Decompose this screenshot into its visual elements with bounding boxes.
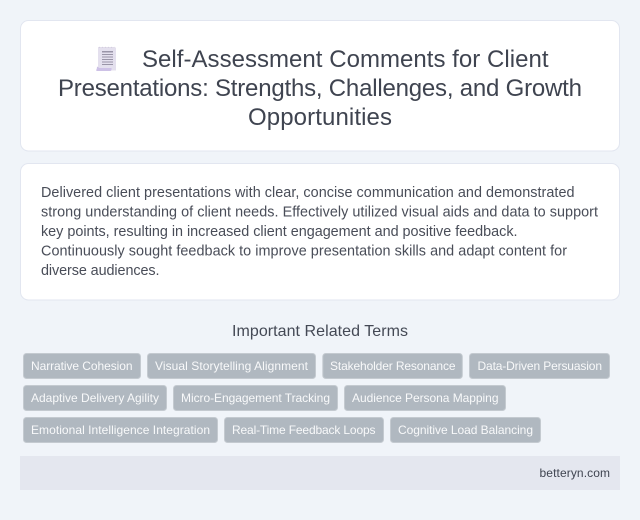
title: Self-Assessment Comments for Client xyxy=(142,46,549,73)
panel: related term tags: Real-Time Feedback Loops xyxy=(232,423,376,437)
text block: summary: Continuously sought feedback to improve presentation skills and adapt content for xyxy=(41,244,567,260)
text block: summary: key points, resulting in increased client engagement and positive feedback. xyxy=(41,224,518,240)
icon: receipt scroll xyxy=(96,47,116,71)
panel: title card xyxy=(20,20,620,151)
footer source label: betteryn.com xyxy=(540,466,610,480)
panel: related term tags: Cognitive Load Balancing xyxy=(398,423,533,437)
text block: summary: strong understanding of client needs. Effectively utilized visual aids and data to support xyxy=(41,204,598,220)
text block: summary: diverse audiences. xyxy=(41,263,160,279)
panel: related term tags: Audience Persona Mapping xyxy=(352,391,498,405)
title: Presentations: Strengths, Challenges, and Growth xyxy=(58,75,582,102)
panel: related term tags: Stakeholder Resonance xyxy=(330,359,456,373)
text block: summary xyxy=(41,185,598,279)
panel: related term tags: Micro-Engagement Tracking xyxy=(181,391,330,405)
title: Opportunities xyxy=(248,104,392,131)
panel: related term tags: Data-Driven Persuasion xyxy=(478,359,602,373)
footer bar xyxy=(20,456,620,490)
text block: summary: Delivered client presentations with clear, concise communication and demonstrated xyxy=(41,185,574,201)
panel: related term tags: Adaptive Delivery Agility xyxy=(31,391,159,405)
heading: important related terms: Important Related Terms xyxy=(232,323,408,340)
panel: summary card xyxy=(20,164,620,300)
panel: related term tags: Visual Storytelling Alignment xyxy=(155,359,309,373)
title xyxy=(58,46,582,131)
panel: related term tags: Emotional Intelligence Integration xyxy=(31,423,210,437)
panel: related term tags: Narrative Cohesion xyxy=(31,359,132,373)
panel: related term tags xyxy=(24,354,610,442)
